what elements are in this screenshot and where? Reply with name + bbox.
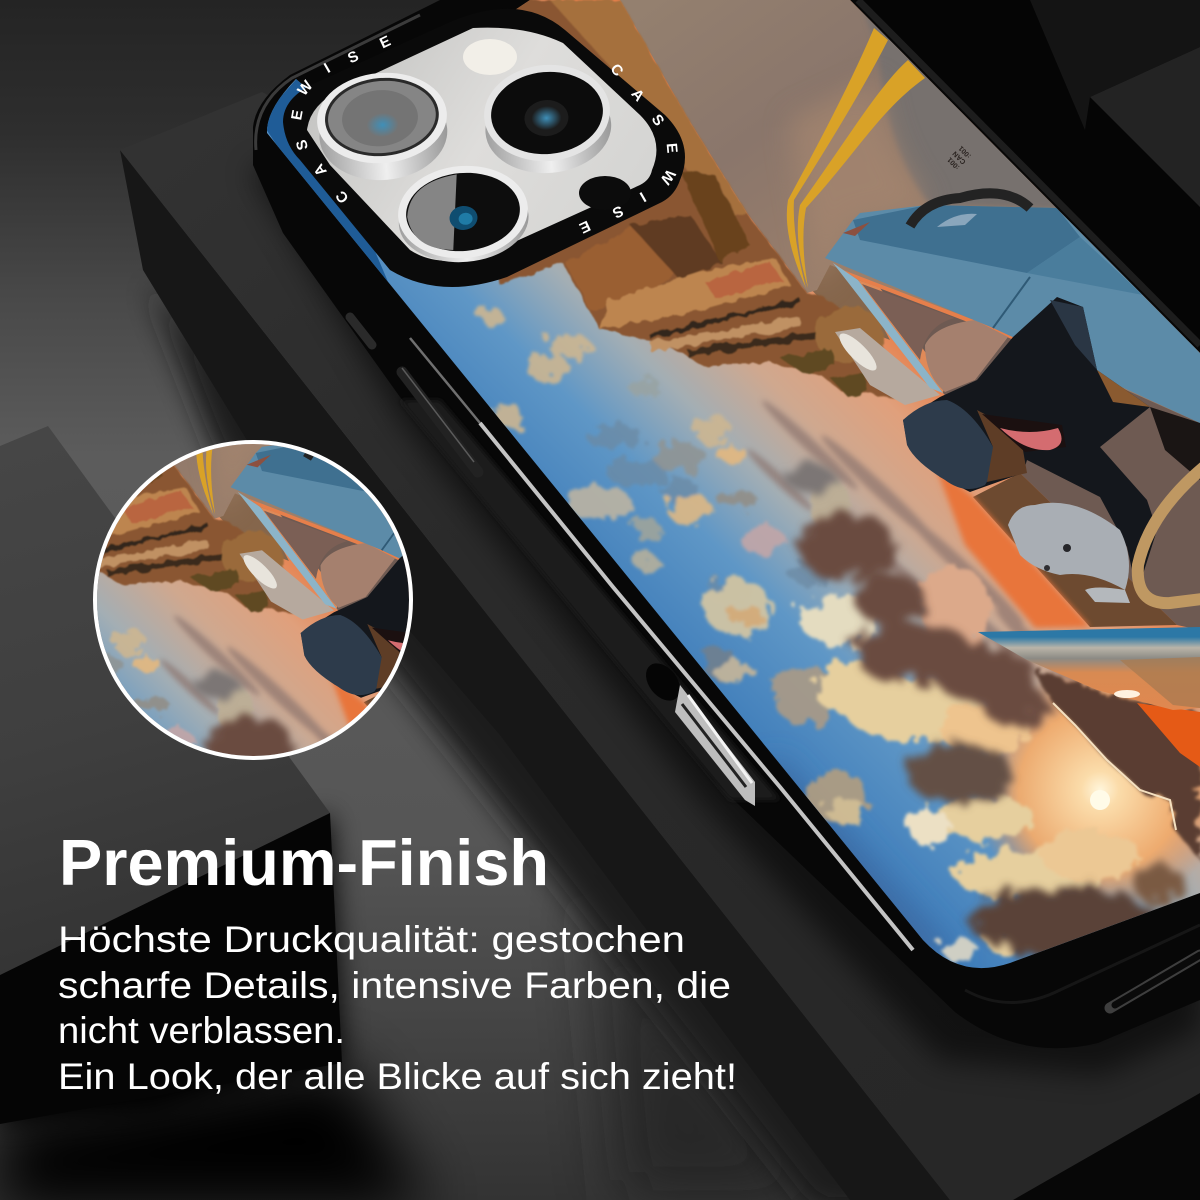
rock shadow band two xyxy=(680,170,750,262)
phone body xyxy=(253,0,1200,1048)
phone shadow xyxy=(250,100,1200,1075)
body text: Ein Look, der alle Blicke auf sich zieht! xyxy=(58,1056,737,1097)
main lens xyxy=(480,60,615,178)
camera module xyxy=(283,9,685,287)
sunset streak clouds xyxy=(744,396,1089,696)
lower rim xyxy=(965,925,1200,1002)
ground behind waterfall xyxy=(807,258,890,340)
sun xyxy=(1090,790,1110,810)
dog tongue xyxy=(1000,428,1062,450)
CASEWISE ring lettering: S xyxy=(610,202,626,221)
seat orange rim xyxy=(858,280,945,393)
charging port inner xyxy=(1115,955,1200,1005)
small block front face xyxy=(0,813,342,1124)
dog body xyxy=(903,297,1157,593)
power button recess xyxy=(639,657,687,707)
wood dashboard xyxy=(973,473,1177,627)
CASEWISE ring lettering: S xyxy=(345,48,361,67)
dark brown cloud mass xyxy=(784,464,1186,956)
lower sky depth xyxy=(775,758,948,960)
chrome edge highlight xyxy=(480,423,913,950)
CASEWISE ring lettering: A xyxy=(310,160,330,179)
CASEWISE ring lettering: A xyxy=(628,86,648,105)
rock shadow band one xyxy=(630,215,722,280)
blue-grey clouds xyxy=(587,424,838,602)
upper rock band xyxy=(550,0,747,220)
car body xyxy=(825,205,1200,423)
telephoto lens xyxy=(394,161,532,267)
chrome edge dim xyxy=(410,338,480,423)
main block side face xyxy=(120,150,950,1200)
dog ear xyxy=(1050,300,1097,370)
wing sheen xyxy=(1114,690,1140,698)
rock dome xyxy=(815,307,885,363)
rock mid tone xyxy=(566,226,674,310)
car interior xyxy=(858,280,1200,630)
road tan shade xyxy=(790,80,930,290)
rock light band xyxy=(600,258,790,330)
silver button dark line xyxy=(682,704,746,787)
dog muzzle xyxy=(977,410,1027,482)
car upper panel xyxy=(853,205,1080,273)
car door seam xyxy=(993,277,1030,328)
small clouds xyxy=(477,307,869,823)
cream cloud mass xyxy=(800,479,1140,961)
seat left xyxy=(862,284,955,360)
road print mark: :001 xyxy=(958,144,973,159)
phone back artwork xyxy=(250,0,1200,1000)
small block top face xyxy=(0,426,330,975)
charging port xyxy=(1110,955,1200,1008)
silver button bright line xyxy=(688,695,752,783)
CASEWISE ring lettering: E xyxy=(377,33,393,52)
golden road line left xyxy=(787,28,888,288)
steering wheel xyxy=(1138,462,1200,603)
rock lower light xyxy=(650,322,800,347)
volume button highlight xyxy=(402,368,474,462)
sensor hole xyxy=(579,176,631,210)
CASEWISE ring lettering: W xyxy=(294,77,317,99)
camera glass plate xyxy=(307,28,656,261)
ultra wide lens xyxy=(313,68,452,185)
body text xyxy=(58,919,737,1097)
car tail light xyxy=(843,222,870,236)
CASEWISE ring lettering: I xyxy=(637,188,649,205)
left strip blue xyxy=(267,79,388,282)
CASEWISE ring lettering: E xyxy=(577,217,593,236)
waterfall xyxy=(835,328,940,405)
right seat shadow xyxy=(1150,407,1200,480)
body text: Höchste Druckqualität: gestochen xyxy=(58,919,685,960)
CASEWISE ring lettering: C xyxy=(332,187,352,206)
top right block xyxy=(850,0,1200,500)
car right panel xyxy=(1027,237,1143,295)
CASEWISE ring lettering xyxy=(288,33,680,236)
body text: scharfe Details, intensive Farben, die xyxy=(58,965,731,1006)
CASEWISE ring lettering: E xyxy=(288,109,307,121)
road print mark: :001 xyxy=(946,156,961,170)
sun halo xyxy=(988,676,1200,902)
dog tan chest xyxy=(1097,370,1150,407)
side wall sheen xyxy=(400,400,780,800)
beige small clouds xyxy=(477,307,869,823)
road print mark: CAN xyxy=(952,150,967,165)
white dog eye xyxy=(1063,544,1071,552)
CASEWISE ring lettering: E xyxy=(663,142,680,154)
title: Premium-Finish xyxy=(59,826,549,899)
volume button xyxy=(402,372,478,472)
olive patch one xyxy=(780,348,835,375)
flash xyxy=(463,39,517,75)
car wing xyxy=(978,627,1200,710)
rock red band xyxy=(705,262,782,298)
sky xyxy=(250,0,1200,1000)
dark sunset cloud bank xyxy=(1030,668,1200,860)
bright orange glow xyxy=(1137,703,1200,767)
soft block shadow xyxy=(150,285,960,1200)
seat back xyxy=(925,320,1008,392)
dog mouth xyxy=(982,414,1066,452)
right rim line xyxy=(858,0,1200,345)
rim highlight xyxy=(256,15,420,150)
dog head xyxy=(903,400,1000,489)
CASEWISE ring lettering: I xyxy=(321,60,333,77)
CASEWISE ring lettering: W xyxy=(656,166,679,188)
lower lit fade xyxy=(590,880,830,1200)
camera ring xyxy=(283,9,685,287)
road print mark xyxy=(948,146,971,169)
orange strip xyxy=(935,465,1090,628)
rottweiler dog xyxy=(903,297,1200,593)
olive patch two xyxy=(830,372,868,397)
road grey wedge xyxy=(864,15,1056,208)
CASEWISE ring lettering: S xyxy=(648,111,667,129)
road surface xyxy=(620,0,1200,430)
cloud rim light xyxy=(1053,703,1176,830)
wing wood reflection xyxy=(1120,657,1200,708)
silver side button xyxy=(675,685,755,806)
waterfall foam xyxy=(835,329,881,375)
car roof handle xyxy=(910,193,1030,226)
mute switch xyxy=(350,317,372,345)
canyon rock xyxy=(460,0,905,400)
car fender sliver xyxy=(833,263,943,393)
white dog paw xyxy=(1085,588,1130,603)
CASEWISE ring lettering: C xyxy=(607,61,627,80)
magnified detail circle xyxy=(0,255,591,1155)
rock dark line two xyxy=(687,335,817,353)
white dog nose xyxy=(1044,565,1050,571)
white dog xyxy=(1008,503,1130,603)
golden road line right xyxy=(798,60,925,288)
phone side buttons and ports xyxy=(350,317,1200,1008)
rock dark line one xyxy=(650,300,800,337)
car window xyxy=(937,214,977,227)
CASEWISE ring lettering: S xyxy=(293,138,312,152)
body text: nicht verblassen. xyxy=(58,1010,345,1051)
